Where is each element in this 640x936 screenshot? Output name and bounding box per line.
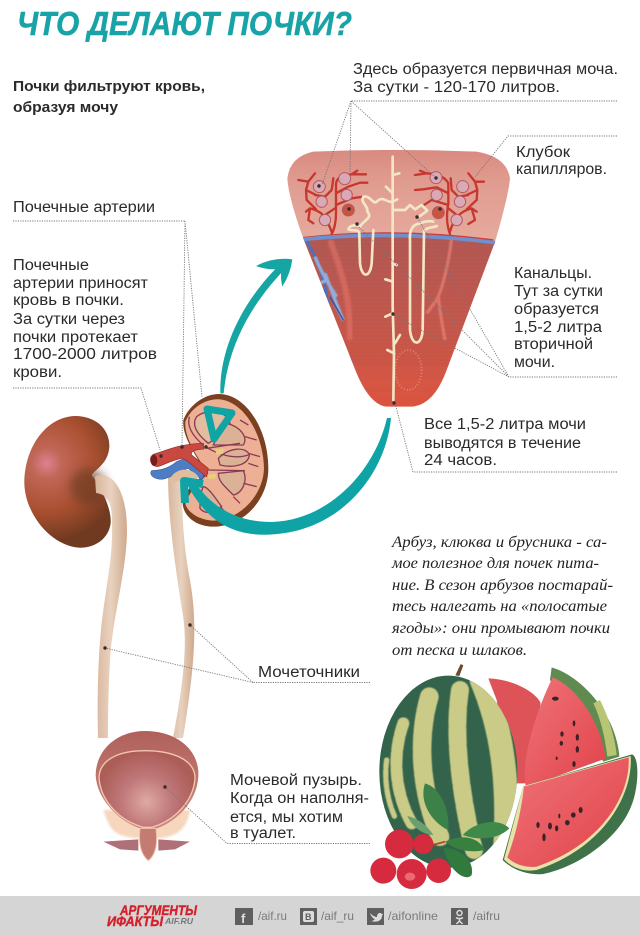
leaves [407, 783, 509, 877]
berries [370, 830, 451, 889]
label: capillaries [516, 144, 607, 178]
label: bladder [230, 772, 369, 842]
label: renal arteries: Почечные артерии [13, 199, 155, 216]
watermelon note: ягоды»: они промывают почки [391, 620, 610, 637]
section lower medulla [303, 237, 495, 407]
label: tubules: Тут за сутки [514, 283, 603, 300]
vk [300, 908, 354, 925]
label: tubules: вторичной [514, 336, 593, 353]
front slice rim [504, 756, 631, 871]
label: capillaries: Клубок [516, 144, 570, 161]
bladder neck [139, 828, 157, 861]
AiF logo [107, 903, 197, 929]
watermelon note: мое полезное для почек пита- [391, 555, 599, 572]
watermelon note [391, 534, 613, 659]
nephron tubules [348, 157, 437, 400]
subtitle: образуя мочу [13, 99, 119, 116]
kidney section diagram [287, 150, 510, 407]
back red half [488, 678, 541, 783]
section upper cortex [287, 150, 510, 242]
label: arteries paragraph: За сутки через [13, 311, 125, 328]
teal triangle arrow loop [207, 409, 232, 439]
pointer dots [103, 176, 442, 789]
odnoklassniki [451, 908, 500, 925]
capillary tree left [298, 171, 367, 234]
watermelon note: Арбуз, клюква и брусника - са- [391, 534, 607, 551]
label: tubules [514, 265, 603, 371]
subtitle: Почки фильтруют кровь, [13, 78, 205, 95]
kidney capsule [183, 394, 268, 527]
left ureter [95, 475, 127, 738]
label: tubules: 1,5-2 литра [514, 319, 602, 336]
label: arteries paragraph: Почечные [13, 257, 89, 274]
label: ureters: Мочеточники [258, 664, 360, 681]
bladder surrounding tissue [103, 810, 190, 838]
arrow up to section [220, 259, 292, 393]
renal hilum shading [70, 468, 107, 505]
small kidney left [24, 416, 111, 548]
label: bladder: Мочевой пузырь. [230, 772, 362, 789]
label: primary urine [353, 61, 618, 96]
label: urine excretion [424, 416, 586, 469]
label: urine excretion: 24 часов. [424, 452, 497, 469]
facebook: f [241, 911, 246, 926]
title: ЧТО ДЕЛАЮТ ПОЧКИ? [17, 5, 352, 42]
label: arteries paragraph: почки протекает [13, 329, 138, 346]
odnoklassniki: /aifru [473, 909, 500, 923]
twitter: /aifonline [388, 909, 438, 923]
medulla texture [305, 240, 488, 391]
red and blue vessels band [303, 233, 495, 243]
twitter [367, 908, 438, 925]
upper slice rind [550, 667, 619, 762]
vessels into the pyramids [189, 417, 248, 471]
kidney capillaries [220, 420, 260, 513]
bladder wall [96, 731, 198, 828]
AiF logo: АРГУМЕНТЫ [119, 903, 197, 918]
label: primary urine: За сутки - 120-170 литров. [353, 79, 560, 96]
front slice rind [503, 754, 637, 874]
ureter top [168, 470, 198, 483]
label: tubules: мочи. [514, 354, 555, 371]
label: arteries paragraph: кровь в почки. [13, 292, 124, 309]
pointer lines [13, 101, 617, 844]
label: tubules: образуется [514, 301, 599, 318]
kidney cortex [185, 399, 264, 521]
renal pyramids [194, 412, 249, 512]
kidney yellow fat [208, 449, 224, 479]
label: arteries paragraph: крови. [13, 364, 62, 381]
seeds [536, 697, 583, 841]
label: arteries paragraph [13, 257, 157, 381]
melon light stripes [386, 680, 506, 850]
vk: /aif_ru [321, 909, 354, 923]
footer bar [0, 896, 640, 936]
capillary tree right [415, 171, 484, 234]
label: primary urine: Здесь образуется первичная моча. [353, 61, 618, 78]
label: bladder: в туалет. [230, 825, 296, 842]
watermelon note: ние. В сезон арбузов постарай- [392, 577, 613, 594]
AiF logo: ИФАКТЫ [107, 914, 163, 929]
label: bladder: ется, мы хотим [230, 809, 343, 826]
subtitle [13, 78, 205, 116]
glomeruli [313, 172, 469, 226]
artery opening [151, 455, 157, 466]
label: urine excretion: выводятся в течение [424, 435, 581, 452]
renal artery [150, 443, 208, 477]
cut kidney right [150, 394, 268, 527]
renal vein [151, 457, 204, 480]
AiF logo: AIF.RU [164, 916, 194, 926]
facebook [235, 908, 287, 926]
watermelon note: тесь налегать на «полосатые [392, 598, 607, 615]
watermelon note: от песка и шлаков. [392, 642, 527, 659]
watermelon and berries illustration [370, 664, 637, 889]
whole watermelon [377, 673, 520, 870]
bladder [96, 731, 198, 861]
bladder cavity [99, 751, 195, 827]
label: urine excretion: Все 1,5-2 литра мочи [424, 416, 586, 433]
vk: B [305, 912, 312, 922]
label: tubules: Канальцы. [514, 265, 592, 282]
front slice flesh [507, 757, 629, 867]
facebook: /aif.ru [258, 909, 287, 923]
label: arteries paragraph: 1700-2000 литров [13, 346, 157, 363]
label: capillaries: капилляров. [516, 161, 607, 178]
pelvic floor [103, 839, 190, 851]
melon stem [455, 664, 463, 676]
label: arteries paragraph: артерии приносят [13, 275, 148, 292]
label: bladder: Когда он наполня- [230, 790, 369, 807]
upper slice flesh [525, 677, 605, 787]
arrow down to ureter [184, 418, 391, 535]
right ureter [168, 474, 194, 738]
